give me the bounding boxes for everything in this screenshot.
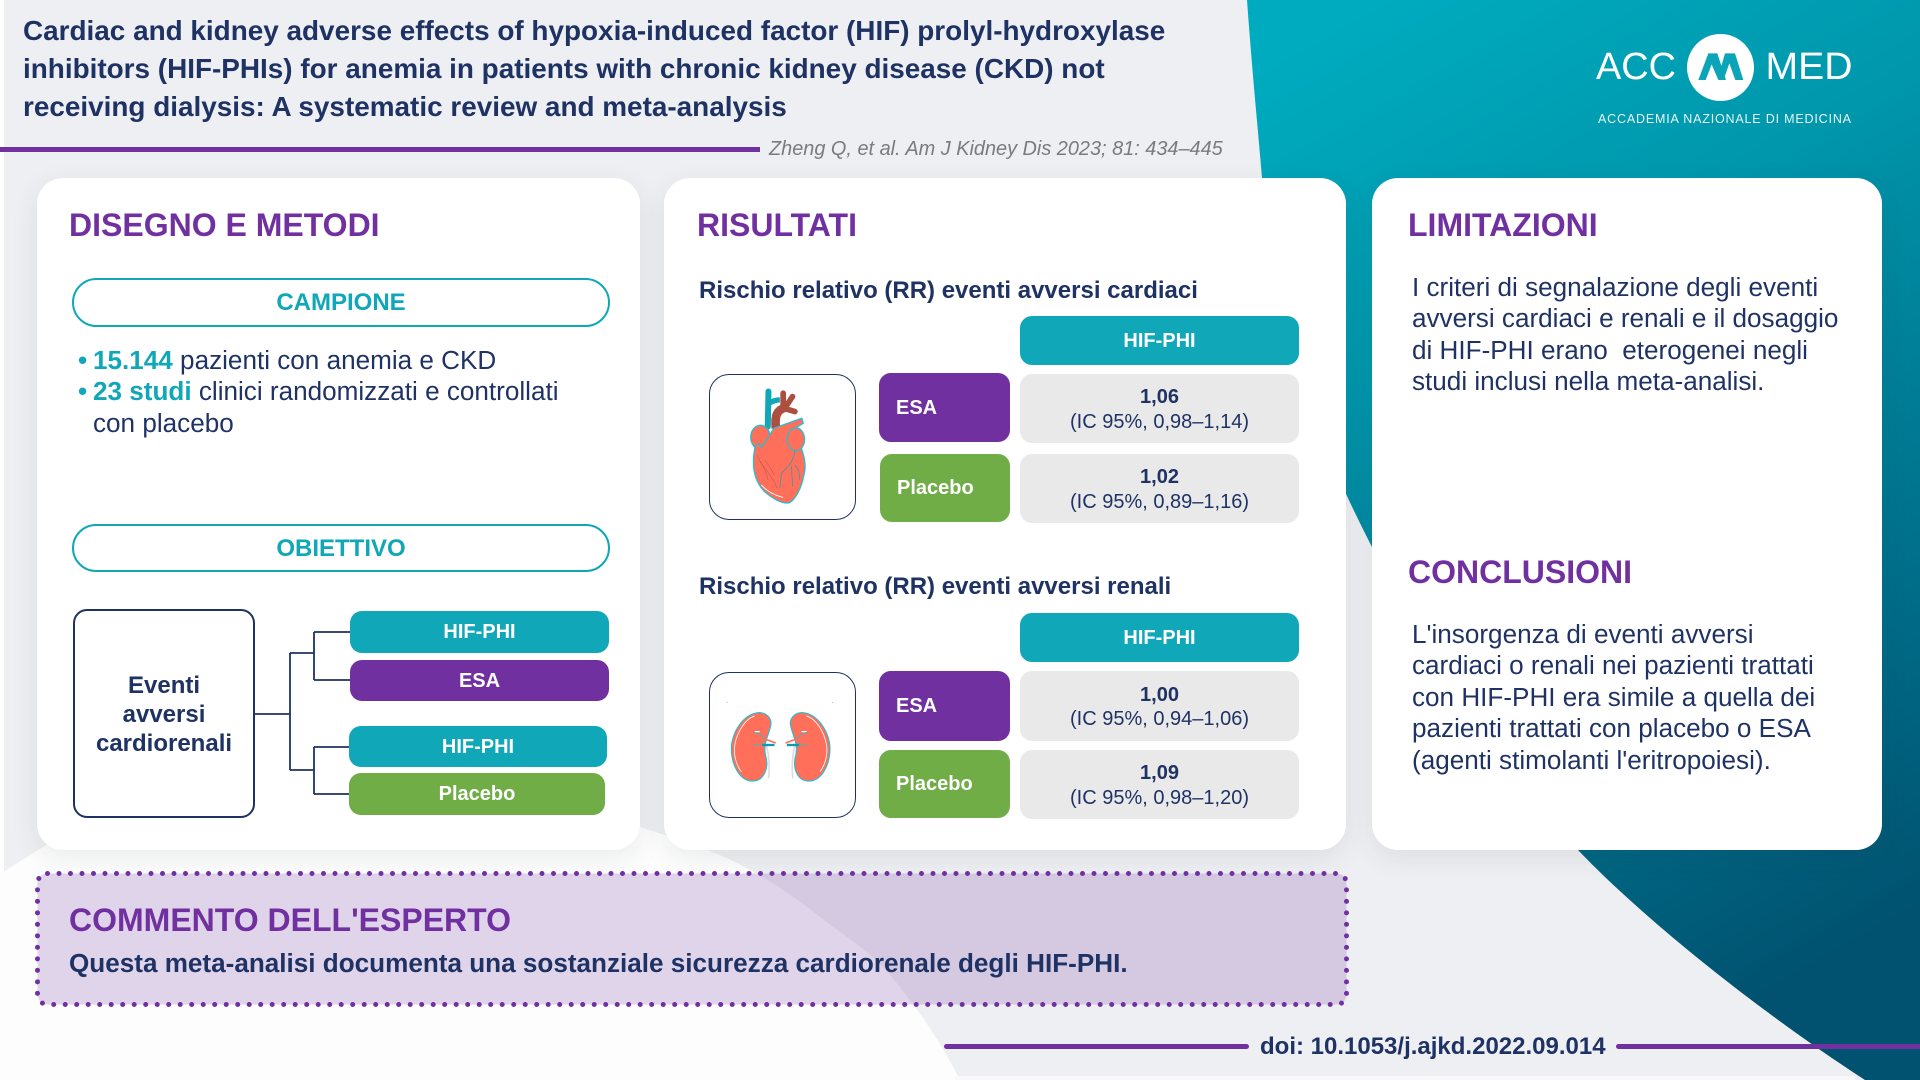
panel: commento dell'esperto: [35, 871, 1349, 1007]
logo: ACCMED: MED: [1766, 46, 1852, 88]
table: renal RR: [709, 613, 1299, 819]
header: HIF-PHI renal: HIF-PHI: [1123, 626, 1196, 648]
heading: limitazioni: LIMITAZIONI: [1408, 207, 1598, 243]
heading: risultati: RISULTATI: [697, 207, 857, 243]
title: Cardiac and kidney adverse effects of hypoxia-induced factor (HIF) prolyl-hydroxylase: [23, 15, 1165, 46]
value: ESA renal RR: 1,00: [1140, 684, 1179, 706]
subheading: renal: Rischio relativo (RR) eventi avversi renali: [699, 573, 1171, 600]
text: limitazioni: I criteri di segnalazione degli eventi: [1412, 272, 1818, 302]
panel: disegno e metodi: con placebo: [93, 408, 234, 438]
text: limitazioni: avversi cardiaci e renali e il dosaggio: [1412, 303, 1838, 333]
text: commento: Questa meta-analisi documenta una sostanziale sicurezza cardiorenale degli HIF-PHI.: [69, 948, 1128, 978]
panel: disegno e metodi: [37, 178, 640, 850]
label: Placebo: [880, 454, 1010, 522]
text: conclusioni: L'insorgenza di eventi avversi: [1412, 619, 1754, 649]
heading: disegno e metodi: DISEGNO E METODI: [69, 207, 380, 243]
label: ESA renal: ESA: [896, 695, 937, 717]
text: conclusioni: cardiaci o renali nei pazienti trattati: [1412, 650, 1814, 680]
subheading: cardiac: Rischio relativo (RR) eventi avversi cardiaci: [699, 277, 1198, 304]
heading: commento: COMMENTO DELL'ESPERTO: [69, 902, 511, 938]
value: Placebo renal RR: 1,09: [1140, 762, 1179, 784]
table: cardiac RR: [709, 316, 1299, 523]
box: Placebo: [349, 773, 605, 815]
dotted frame: [35, 871, 1349, 1007]
pill: campione: [72, 278, 610, 327]
text: conclusioni: con HIF-PHI era simile a quella dei: [1412, 682, 1815, 712]
box: Placebo: Placebo: [439, 783, 515, 805]
box: eventi avversi cardiorenali: cardiorenali: [96, 730, 232, 757]
title: receiving dialysis: A systematic review and meta-analysis: [23, 91, 787, 122]
box: HIF-PHI second: HIF-PHI: [442, 736, 514, 758]
title: inhibitors (HIF-PHIs) for anemia in patients with chronic kidney disease (CKD) not: [23, 53, 1105, 84]
text: limitazioni: studi inclusi nella meta-analisi.: [1412, 366, 1764, 396]
header: HIF-PHI: HIF-PHI: [1123, 330, 1196, 352]
citation: Zheng Q, et al. Am J Kidney Dis 2023; 81: 434–445: [769, 138, 1223, 160]
value: ESA renal RR: [1020, 671, 1299, 741]
label: Placebo: Placebo: [897, 477, 974, 499]
label: ESA renal: [879, 671, 1010, 741]
doi: doi: 10.1053/j.ajkd.2022.09.014: [1260, 1033, 1606, 1060]
box: eventi avversi cardiorenali: Eventi: [128, 672, 200, 699]
text: campione: [78, 345, 559, 438]
pill: obiettivo: OBIETTIVO: [276, 534, 406, 562]
value: Placebo cardiac RR: [1020, 454, 1299, 523]
header: HIF-PHI: [1020, 316, 1299, 365]
text: conclusioni: (agenti stimolanti l'eritropoiesi).: [1412, 745, 1771, 775]
text: limitazioni: di HIF-PHI erano eterogenei negli: [1412, 335, 1808, 365]
panel: disegno e metodi: 15.144 pazienti con anemia e CKD: [93, 345, 496, 375]
header: HIF-PHI renal: [1020, 613, 1299, 662]
label: ESA: [879, 373, 1010, 442]
box: eventi avversi cardiorenali: [73, 609, 255, 818]
value: ESA cardiac RR: (IC 95%, 0,98–1,14): [1070, 410, 1249, 432]
box: HIF-PHI: [350, 611, 609, 653]
value: ESA renal RR: (IC 95%, 0,94–1,06): [1070, 708, 1249, 730]
value: Placebo renal RR: (IC 95%, 0,98–1,20): [1070, 786, 1249, 808]
panel: disegno e metodi: 23 studi clinici randomizzati e controllati: [93, 376, 559, 406]
value: ESA cardiac RR: [1020, 374, 1299, 443]
icon: heart: [709, 374, 856, 520]
text: limitazioni: [1412, 272, 1838, 396]
connector lines: [255, 631, 350, 795]
pill: obiettivo: [72, 524, 610, 572]
logo: ACCMED: ACC: [1596, 46, 1676, 88]
doi line left: [944, 1044, 1249, 1049]
doi line right: [1616, 1044, 1920, 1049]
title: [23, 15, 1165, 122]
logo: ACCMED: ACCADEMIA NAZIONALE DI MEDICINA: [1598, 112, 1852, 126]
value: Placebo cardiac RR: 1,02: [1140, 466, 1179, 488]
icon: kidneys: [709, 672, 856, 818]
logo: ACCMED: [1596, 34, 1852, 126]
label: Placebo renal: [879, 750, 1010, 818]
panel: limitazioni e conclusioni: [1372, 178, 1882, 850]
box: HIF-PHI second: [349, 726, 607, 767]
text: conclusioni: pazienti trattati con placebo o ESA: [1412, 713, 1811, 743]
heading: conclusioni: CONCLUSIONI: [1408, 554, 1632, 590]
diagram: eventi avversi cardiorenali: [73, 609, 609, 818]
pill: campione: CAMPIONE: [276, 289, 406, 316]
box: eventi avversi cardiorenali: avversi: [123, 701, 205, 728]
value: Placebo renal RR: [1020, 750, 1299, 819]
text: conclusioni: [1412, 619, 1815, 775]
box: ESA: [350, 660, 609, 701]
label: ESA: ESA: [896, 396, 937, 418]
panel: risultati: [664, 178, 1346, 850]
label: Placebo renal: Placebo: [896, 773, 973, 795]
box: HIF-PHI: HIF-PHI: [443, 621, 516, 643]
text: campione: •: [78, 345, 87, 375]
title underline: [0, 147, 760, 152]
value: Placebo cardiac RR: (IC 95%, 0,89–1,16): [1070, 490, 1249, 512]
text: campione: •: [78, 376, 87, 406]
box: ESA: ESA: [459, 670, 500, 692]
value: ESA cardiac RR: 1,06: [1140, 386, 1179, 408]
